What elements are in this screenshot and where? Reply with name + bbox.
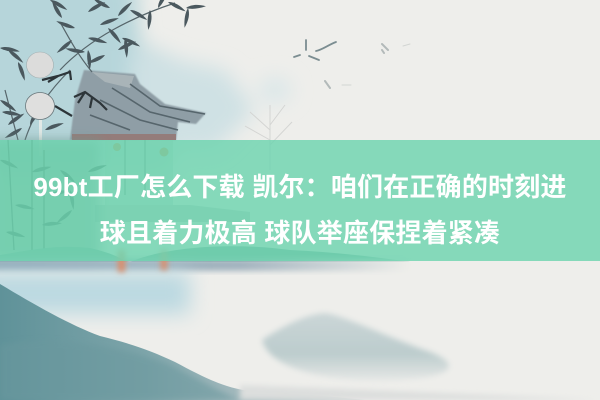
headline text <box>33 172 567 248</box>
misty distant mountain <box>262 313 449 381</box>
teal title banner <box>0 140 600 261</box>
foreground mountain <box>0 284 600 400</box>
paper lanterns <box>26 52 54 156</box>
temple roof <box>70 70 206 140</box>
flying cranes <box>294 40 410 88</box>
bare winter tree <box>245 105 292 170</box>
headline text: 99bt工厂怎么下载 凯尔：咱们在正确的时刻进 <box>33 172 567 202</box>
headline text: 球且着力极高 球队举座保捏着紧凑 <box>100 218 500 248</box>
far hills behind banner <box>0 246 410 262</box>
pine branches <box>42 72 107 116</box>
bamboo branches and leaves <box>0 0 206 140</box>
water horizon band <box>0 250 410 314</box>
blue wash sky <box>0 0 291 170</box>
building and bamboo behind banner <box>0 140 250 262</box>
